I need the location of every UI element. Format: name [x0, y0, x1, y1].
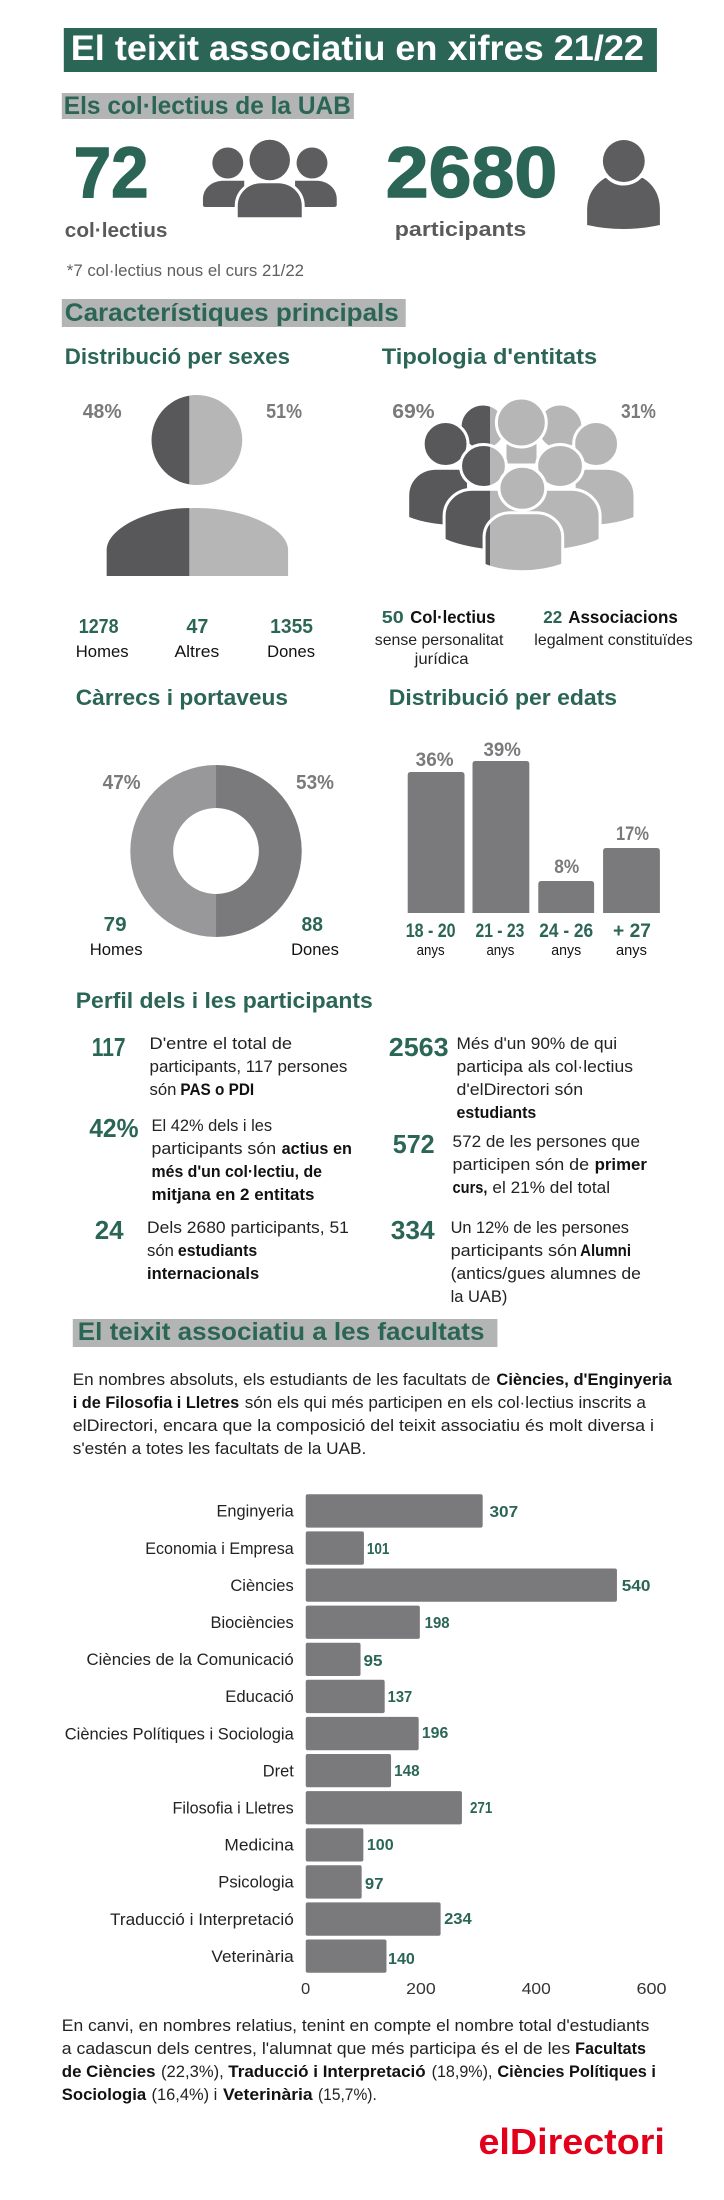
icon: person	[587, 140, 660, 229]
bar values: 36%	[416, 750, 454, 771]
text block: conclusion: (18,9%),	[432, 2062, 492, 2081]
axis labels: 0	[301, 1981, 310, 1998]
panel: tipologia d'entitats	[375, 344, 693, 668]
heading: càrrecs i portaveus: Càrrecs i portaveus	[76, 685, 288, 710]
stat: 50 col·lectius	[375, 607, 504, 668]
text block: intro facultats: En nombres absoluts, els estudiants de les facultats de	[73, 1370, 490, 1389]
label: 31%: 31%	[621, 401, 656, 423]
stat: homes: 1278	[79, 616, 119, 638]
stat: homes	[76, 616, 129, 661]
stat: 88 dones: 88	[302, 914, 323, 936]
stat: 42%: més d'un col·lectiu, de	[152, 1162, 322, 1181]
stat: 334: la UAB)	[451, 1287, 507, 1306]
text block: conclusion	[62, 2016, 656, 2104]
label: 69%: 69%	[392, 401, 435, 423]
stat: 88 dones: Dones	[291, 940, 339, 959]
bar labels: anys	[486, 942, 514, 959]
panel: perfil dels i les participants	[76, 988, 647, 1306]
text block: conclusion: (22,3%),	[161, 2062, 224, 2081]
stat: 24: 24	[95, 1217, 124, 1245]
stat: 79 homes: 79	[104, 914, 127, 936]
stat: 42%: participants són	[152, 1139, 276, 1158]
value labels: 97	[365, 1876, 384, 1893]
stat: 79 homes	[90, 914, 143, 959]
stat: 50 col·lectius: Col·lectius	[410, 607, 495, 627]
stat: 24: estudiants	[178, 1241, 257, 1260]
stat: 2563: 2563	[389, 1034, 449, 1062]
category labels: Biociències	[211, 1613, 294, 1632]
text block: intro facultats: elDirectori, encara que la composició del teixit associatiu és molt diversa i	[73, 1416, 654, 1435]
text block: conclusion: a cadascun dels centres, l'alumnat que més participa és el de les	[62, 2039, 570, 2058]
text block: conclusion: En canvi, en nombres relatius, tenint en compte el nombre total d'estudiants	[62, 2016, 649, 2035]
stat: 117: 117	[92, 1034, 126, 1062]
stat: 72 col·lectius	[65, 134, 167, 242]
text block: intro facultats: són els qui més participen en els col·lectius inscrits a	[245, 1393, 647, 1412]
stat: 79 homes: Homes	[90, 940, 143, 959]
value labels: 140	[388, 1951, 415, 1968]
category labels: Enginyeria	[217, 1502, 294, 1521]
category labels: Educació	[225, 1687, 294, 1706]
stat: 117: participants, 117 persones	[150, 1057, 347, 1076]
category labels: Veterinària	[211, 1947, 294, 1966]
stat: 24: internacionals	[147, 1264, 259, 1283]
text block: intro facultats: s'estén a totes les facultats de la UAB.	[73, 1439, 366, 1458]
text block: intro facultats	[73, 1370, 672, 1458]
stat: 42%: mitjana en 2 entitats	[152, 1185, 315, 1204]
stat: 24: són	[147, 1241, 174, 1260]
stat: 42%	[89, 1115, 352, 1204]
bar values	[416, 740, 649, 878]
category labels: Ciències de la Comunicació	[87, 1650, 294, 1669]
stat: 572: participen són de	[453, 1155, 589, 1174]
bar labels: anys	[616, 942, 647, 959]
stat: altres	[174, 616, 219, 661]
axis labels: 200	[406, 1981, 436, 1998]
stat: dones	[267, 616, 315, 661]
stat: 24: Dels 2680 participants, 51	[147, 1218, 349, 1237]
stat: 22 associacions: legalment constituïdes	[534, 632, 693, 649]
note: new collectives: *7 col·lectius nous el curs 21/22	[67, 261, 304, 280]
label: 51%: 51%	[266, 401, 302, 423]
stat: 2563: participa als col·lectius	[457, 1057, 633, 1076]
stat: 42%: 42%	[89, 1115, 139, 1143]
bar labels: anys	[551, 942, 581, 959]
bar labels: + 27	[613, 921, 651, 942]
bars	[306, 1494, 617, 1973]
bar labels: anys	[417, 942, 445, 959]
axis labels: 600	[636, 1981, 667, 1998]
stat: 572	[393, 1131, 647, 1197]
stat: 42%: El 42% dels i les	[152, 1116, 272, 1135]
stat: 117: són	[150, 1080, 176, 1099]
stat: 334: participants són	[451, 1241, 577, 1260]
text block: conclusion: Sociologia	[62, 2085, 147, 2104]
text block: conclusion: Facultats	[575, 2039, 646, 2058]
bar values: 8%	[554, 857, 579, 878]
panel: distribució per sexes	[65, 344, 315, 661]
value labels: 95	[364, 1653, 383, 1670]
stat: 572: curs,	[453, 1178, 487, 1197]
category labels: Dret	[263, 1761, 294, 1780]
icon: crowd split by type	[408, 398, 635, 572]
bar chart: ages	[408, 761, 660, 913]
stat: 88 dones	[291, 914, 339, 959]
stat: 2680 participants	[386, 134, 557, 241]
text block: intro facultats: Ciències, d'Enginyeria	[496, 1370, 672, 1389]
stat: homes: Homes	[76, 642, 129, 661]
heading: distribució per edats: Distribució per edats	[389, 685, 617, 710]
bar values: 39%	[483, 740, 521, 761]
stat: 42%: actius en	[282, 1139, 352, 1158]
stat: 334: (antics/gues alumnes de	[451, 1264, 641, 1283]
logo: elDirectori: elDirectori	[478, 2121, 665, 2162]
stat: 72 col·lectius: 72	[74, 134, 149, 213]
stat: 22 associacions	[534, 607, 693, 649]
stat: altres: 47	[186, 616, 208, 638]
stat: 2563: d'elDirectori són	[457, 1080, 583, 1099]
value labels	[364, 1504, 651, 1968]
bar labels	[406, 921, 651, 959]
axis labels	[301, 1981, 667, 1998]
stat: 117: D'entre el total de	[150, 1034, 292, 1053]
value labels: 196	[422, 1725, 448, 1742]
stat: 2563: Més d'un 90% de qui	[457, 1034, 617, 1053]
title: El teixit associatiu en xifres 21/22	[71, 29, 644, 68]
stat: 572: el 21% del total	[492, 1178, 610, 1197]
value labels: 148	[394, 1763, 420, 1780]
bar labels: 21 - 23	[475, 921, 524, 942]
category labels: Filosofia i Lletres	[173, 1798, 294, 1818]
category labels: Traducció i Interpretació	[110, 1910, 294, 1929]
bar labels: 24 - 26	[539, 921, 593, 942]
panel: càrrecs i portaveus	[76, 685, 339, 959]
category labels: Ciències	[230, 1576, 294, 1595]
stat: 117: PAS o PDI	[180, 1080, 254, 1099]
axis labels: 400	[522, 1981, 551, 1998]
text block: conclusion: (16,4%) i	[152, 2085, 217, 2104]
text block: intro facultats: i de Filosofia i Lletres	[73, 1393, 239, 1412]
stat: 334: Alumni	[580, 1241, 631, 1260]
category labels	[65, 1502, 294, 1966]
value labels: 234	[444, 1911, 472, 1928]
value labels: 271	[470, 1800, 492, 1817]
bar values: 17%	[616, 824, 649, 845]
stat: 50 col·lectius: 50	[382, 607, 404, 627]
stat: 50 col·lectius: jurídica	[414, 651, 469, 668]
icon: group of people	[203, 140, 337, 217]
label: 48%: 48%	[83, 401, 122, 423]
bar chart: facultats	[65, 1494, 667, 1998]
value labels: 198	[425, 1615, 450, 1632]
value labels: 307	[489, 1504, 518, 1521]
stat: 572: 572	[393, 1131, 435, 1159]
stat: 572: primer	[595, 1155, 647, 1174]
heading: tipologia d'entitats: Tipologia d'entitats	[382, 344, 597, 369]
stat: 117	[92, 1034, 347, 1099]
category labels: Ciències Polítiques i Sociologia	[65, 1724, 294, 1743]
stat: 24	[95, 1217, 349, 1283]
heading: perfil: Perfil dels i les participants	[76, 988, 373, 1013]
stat: altres: Altres	[174, 642, 219, 661]
label: 47%: 47%	[103, 772, 141, 794]
bar labels: 18 - 20	[406, 921, 456, 942]
label: 53%: 53%	[296, 772, 334, 794]
stat: 50 col·lectius: sense personalitat	[375, 632, 504, 649]
stat: dones: Dones	[267, 642, 315, 661]
stat: 22 associacions: Associacions	[568, 607, 678, 627]
category labels: Medicina	[224, 1836, 294, 1855]
panel: distribució per edats	[389, 685, 660, 959]
text block: conclusion: Traducció i Interpretació	[228, 2062, 426, 2081]
heading: Els col·lectius de la UAB: Els col·lectius de la UAB	[64, 92, 351, 120]
heading: el teixit associatiu a les facultats: El teixit associatiu a les facultats	[78, 1318, 484, 1346]
stat: 2563: estudiants	[457, 1103, 536, 1122]
stat: dones: 1355	[270, 616, 313, 638]
stat: 334: 334	[391, 1217, 435, 1245]
value labels: 540	[622, 1578, 651, 1595]
text block: conclusion: Veterinària	[223, 2085, 313, 2104]
stat: 72 col·lectius: col·lectius	[65, 220, 167, 242]
stat: 22 associacions: 22	[543, 607, 562, 627]
heading: distribució per sexes: Distribució per sexes	[65, 344, 290, 369]
stat: 2680 participants: participants	[395, 219, 526, 241]
stat: 2563	[389, 1034, 633, 1122]
value labels: 137	[388, 1689, 412, 1706]
heading: Característiques principals: Característiques principals	[65, 299, 399, 327]
donut chart	[130, 765, 302, 937]
stat: 2680 participants: 2680	[386, 134, 557, 213]
category labels: Psicologia	[218, 1873, 294, 1892]
stat: 334	[391, 1217, 641, 1306]
value labels: 100	[367, 1837, 394, 1854]
icon: person split by sex	[107, 395, 288, 576]
value labels: 101	[367, 1541, 390, 1558]
stat: 572: 572 de les persones que	[453, 1132, 640, 1151]
stat: 334: Un 12% de les persones	[451, 1218, 629, 1237]
category labels: Economia i Empresa	[145, 1539, 294, 1558]
text block: conclusion: Ciències Polítiques i	[497, 2062, 656, 2081]
text block: conclusion: (15,7%).	[318, 2085, 377, 2104]
text block: conclusion: de Ciències	[62, 2062, 156, 2081]
